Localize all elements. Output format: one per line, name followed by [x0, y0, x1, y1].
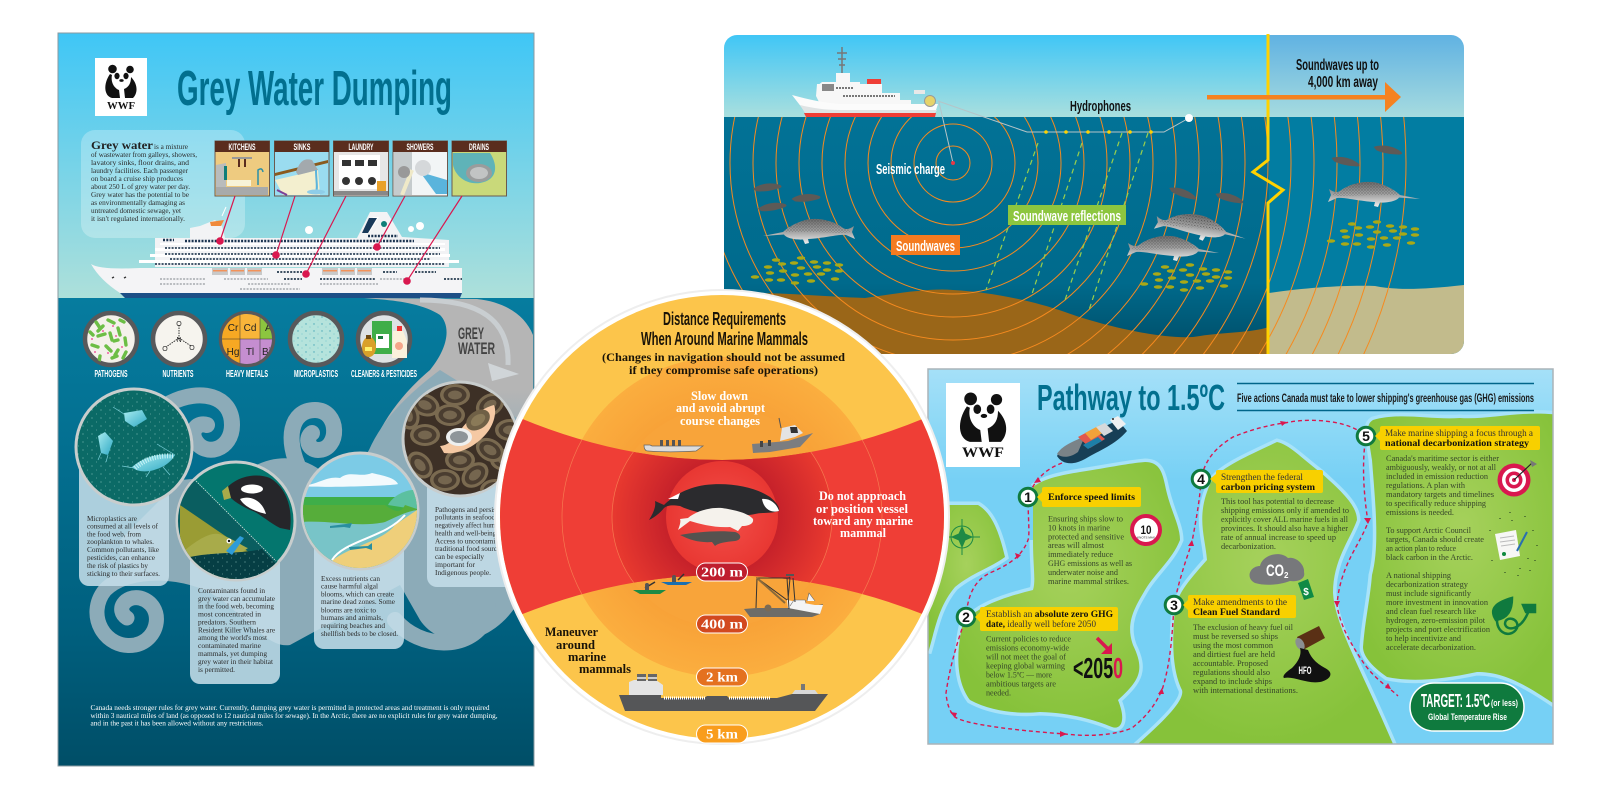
step 5: accelerate decarbonization. [1386, 643, 1476, 652]
step 1: areas will almost [1048, 541, 1105, 550]
callout: food web: Resident Killer Whales are [198, 626, 276, 634]
text block: closing note: within 3 nautical miles of land (as opposed to 12 nautical miles for sewage). In the Arctic, there are no explicit rules for grey water dumping, [90, 711, 498, 720]
icon: nutrients: O [162, 346, 168, 353]
step 2: ambitious targets are [986, 680, 1056, 688]
text: maneuver around: Maneuver [545, 625, 598, 639]
icon row: contaminants [85, 313, 410, 365]
text block: closing note: Canada needs stronger rules for grey water. Currently, dumping grey water is permitted in protected areas and treatment is only required [90, 703, 490, 712]
step 3: expand to include ships [1193, 677, 1272, 686]
distance label: 2 km: 2 km [706, 670, 738, 686]
text block: closing note: and in the past it has been allowed without any restrictions. [90, 718, 264, 728]
cruise ship [91, 207, 462, 298]
icon: kitchens [215, 141, 270, 196]
illustration: plankton circle [76, 389, 192, 505]
callout: algal blooms: cause harmful algal [321, 582, 378, 590]
icon labels: MICROPLASTICS [294, 369, 338, 380]
intro text block: laundry facilities. Each passenger [91, 166, 189, 175]
step 2: needed. [986, 688, 1011, 698]
icon: below 2050 [1073, 638, 1123, 685]
step 4: Strengthen the federal [1221, 472, 1303, 483]
intro text block: Grey water [91, 138, 154, 152]
step 2: 2 [962, 609, 970, 625]
callout: algal blooms: blooms are toxic to [321, 606, 376, 614]
step 1: marine mammal strikes. [1048, 577, 1129, 586]
step 5 [1357, 426, 1540, 652]
step 4: shipping emissions only if amended to [1221, 506, 1349, 515]
heading: grey water: WATER [458, 339, 495, 358]
step 4: carbon pricing system [1221, 483, 1315, 493]
step 2: will not meet the goal of [986, 652, 1066, 662]
icon: HFO barrel: HFO [1298, 665, 1312, 677]
icon: nutrients: O [189, 345, 195, 352]
callout: food web: among the world's most [198, 633, 268, 642]
icon: container ship [1057, 416, 1127, 463]
target badge: TARGET: 1.5ºC [1421, 691, 1490, 711]
distance label: 2 km [696, 668, 748, 686]
icon: showers [393, 141, 448, 196]
step 3: must be reversed so ships [1193, 632, 1278, 641]
step 3 [1165, 595, 1298, 695]
distance label: 400 m: 400 m [701, 618, 743, 632]
icon: heavy metals: Hg [227, 347, 239, 358]
distance label: 5 km: 5 km [706, 728, 738, 742]
step 1: protected and sensitive [1048, 532, 1124, 542]
step 2: keeping global warming [986, 662, 1066, 670]
intro text block: about 250 L of grey water per day. [91, 182, 190, 191]
step 1: GHG emissions as well as [1048, 559, 1132, 568]
callout: food web: is permitted. [198, 665, 235, 674]
callout: food web: most concentrated in [198, 610, 261, 618]
step 5: black carbon in the Arctic. [1386, 553, 1473, 562]
step 5: more investment in innovation [1386, 598, 1489, 607]
callout: food web: grey water can accumulate [198, 594, 276, 603]
step 3: Make amendments to the [1193, 598, 1287, 608]
step 5: national decarbonization strategy [1385, 439, 1529, 449]
text: maneuver around [545, 625, 631, 676]
target badge: Global Temperature Rise [1428, 712, 1507, 723]
step 4: 4 [1197, 471, 1205, 487]
step 2: Current policies to reduce [986, 634, 1071, 644]
callout: microplastics: consumed at all levels of [87, 522, 159, 530]
heading: grey water: GREY [458, 324, 484, 343]
callout: food web: mammals, yet dumping [198, 649, 267, 658]
callout: food web: Contaminants found in [198, 586, 265, 595]
label: soundwave reflections [1008, 205, 1126, 225]
callout: seafood: pollutants in seafood can [435, 512, 507, 522]
icon labels: HEAVY METALS [226, 369, 268, 380]
text block: closing note [90, 703, 498, 728]
label: soundwaves up to 4000 km: Soundwaves up to [1296, 57, 1379, 74]
callout: microplastics: zooplankton to whales. [87, 537, 154, 546]
intro text block: it isn't regulated internationally. [91, 214, 185, 223]
hydrophones array [938, 101, 1193, 165]
target badge [1410, 683, 1524, 731]
heading: distance requirements [602, 309, 845, 377]
step 5: must include significantly [1386, 589, 1472, 598]
distance label: 5 km [696, 725, 748, 743]
step 3: The exclusion of heavy fuel oil [1193, 623, 1294, 632]
bowhead whale [649, 484, 779, 520]
icon: heavy metals: Bi [262, 347, 271, 358]
label: soundwave reflections: Soundwave reflections [1013, 208, 1121, 225]
target badge: (or less) [1491, 698, 1518, 708]
subtitle [1237, 384, 1534, 410]
step 5: To support Arctic Council [1386, 526, 1472, 535]
callout: food web [190, 530, 280, 684]
callout: seafood: traditional food sources [435, 544, 503, 553]
label: soundwaves: Soundwaves [896, 238, 955, 255]
title: Pathway to 1.5C: Pathway to 1.5ºC [1037, 377, 1225, 418]
step 3: accountable. Proposed [1193, 659, 1269, 668]
step 5: hydrogen, zero-emission pilot [1386, 616, 1486, 625]
distance label: 200 m [696, 563, 748, 581]
icon: nutrients: N [176, 337, 182, 344]
step 2: date, ideally well before 2050 [986, 619, 1096, 630]
callout: algal blooms: requiring beaches and [321, 621, 385, 630]
intro text block: is a mixture [154, 142, 189, 151]
illustration: beach circle [300, 453, 420, 570]
marine life: fish schools [751, 220, 1419, 292]
intro text block: untreated domestic sewage, yet [91, 206, 182, 215]
marine life: narwhals [763, 182, 1420, 261]
icon labels [94, 369, 417, 380]
step 5: to specifically reduce shipping [1386, 499, 1487, 508]
seabed [724, 290, 1269, 354]
step 1: Enforce speed limits [1048, 493, 1135, 503]
logo: WWF panda [95, 58, 147, 116]
icon: microplastics [290, 313, 342, 365]
step 3: and dirtiest fuel are held [1193, 650, 1276, 659]
callout: algal blooms: blooms, which can create [321, 590, 395, 598]
icon: 10 knots sign: KNOTS MAX [1137, 536, 1155, 540]
icon: compass [944, 519, 980, 555]
callout: microplastics: Common pollutants, like [87, 545, 160, 554]
text: do not approach: mammal [840, 526, 887, 540]
text: slow down: course changes [680, 414, 760, 428]
step 3: with international destinations. [1193, 686, 1298, 695]
beluga [678, 508, 753, 531]
route arrowheads [950, 421, 1391, 737]
callout: algal blooms: Excess nutrients can [321, 574, 380, 583]
intro text block: Grey water has the potential to be [91, 190, 190, 199]
step 1: Ensuring ships slow to [1048, 514, 1123, 524]
icon: signed document [1490, 512, 1537, 576]
step 4: explicitly cover ALL marine fuels in all [1221, 515, 1349, 524]
logo: WWF panda: WWF [107, 100, 135, 112]
panel: Grey Water Dumping [58, 33, 534, 766]
icon: target [1498, 460, 1537, 496]
icon: 10 knots sign: 10 [1140, 523, 1152, 537]
divider: break in scale [1253, 34, 1283, 354]
illustration: food web circle [175, 462, 300, 590]
panel: distance requirements circle [490, 289, 950, 750]
panel: Pathway to 1.5C [928, 369, 1560, 744]
distance label: 200 m: 200 m [701, 566, 743, 580]
callout: microplastics: sticking to their surfaces. [87, 569, 160, 578]
survey ship [792, 47, 938, 117]
text: maneuver around: marine [568, 650, 606, 664]
text: maneuver around: mammals [579, 662, 631, 676]
soundwave rings [724, 117, 1406, 354]
icon: heavy metals [221, 313, 274, 365]
callout: algal blooms: shellfish beds to be closed. [321, 629, 398, 638]
distance label: 400 m [696, 615, 748, 633]
callout: algal blooms: humans and animals, [321, 613, 383, 622]
icon: pathogens [85, 313, 137, 365]
step 5: Canada's maritime sector is either [1386, 454, 1499, 463]
icon: 10 knots sign [1132, 516, 1160, 544]
intro text block: as environmentally damaging as [91, 198, 185, 207]
heading: distance requirements: (Changes in navigation should not be assumed [602, 350, 845, 364]
step 3: Clean Fuel Standard [1193, 608, 1281, 618]
arrow: soundwave reach [1207, 82, 1401, 112]
icon: nutrients [153, 313, 205, 365]
callout: seafood: health and well-being. [435, 528, 498, 538]
route: dashed pink path [946, 420, 1398, 735]
callout: microplastics: the risk of plastics by [87, 561, 148, 570]
step 5: 5 [1362, 428, 1370, 444]
step 5: an action plan to reduce [1386, 544, 1456, 553]
vessel: fishing trawler [744, 574, 823, 617]
icon: drains: DRAINS [469, 142, 489, 152]
step 3: using the most common [1193, 641, 1274, 650]
step 5: projects and port electrification [1386, 625, 1491, 634]
callout: food web: grey water in their habitat [198, 657, 274, 666]
intro text block: lavatory sinks, floor drains, and [91, 158, 189, 167]
label: soundwaves up to 4000 km [1296, 57, 1379, 91]
illustration: oyster circle [402, 380, 516, 498]
intro text block: of wastewater from galleys, showers, [91, 150, 197, 159]
step 5: to help incentivize and [1386, 634, 1462, 643]
text: slow down: and avoid abrupt [676, 401, 766, 415]
text: do not approach [813, 489, 913, 540]
icon: sinks: SINKS [294, 142, 310, 152]
step 4 [1192, 470, 1349, 551]
callout: microplastics: pesticides, can enhance [87, 553, 156, 562]
text: do not approach: or position vessel [816, 502, 909, 516]
step 5: ambiguously, weakly, or not at all [1386, 463, 1497, 472]
callout: algal blooms [314, 520, 404, 649]
icon: laundry: LAUNDRY [348, 142, 374, 152]
step 4: rate of annual increase to speed up [1221, 533, 1336, 542]
far seabed [1269, 285, 1464, 354]
text: do not approach: toward any marine [813, 514, 913, 528]
callout: seafood: Pathogens and persistent [435, 505, 508, 514]
callout: microplastics: Microplastics are [87, 514, 138, 523]
icon: CO2 cloud with tag: $ [1303, 587, 1309, 598]
soundwave reflections [986, 133, 1148, 310]
logo: WWF panda [946, 383, 1020, 467]
callout: food web: in the food web, becoming [198, 602, 274, 610]
arrow: grey water flow [420, 300, 519, 381]
heading: grey water [458, 324, 495, 358]
callout: food web: predators. Southern [198, 618, 256, 626]
icon: HFO barrel [1283, 626, 1330, 682]
step 4: decarbonization. [1221, 542, 1276, 551]
icon: below 2050: <2050 [1073, 653, 1123, 685]
step 5: regulations. A plan with [1386, 481, 1466, 490]
step 5: A national shipping [1386, 571, 1452, 580]
heading: distance requirements: if they compromise safe operations) [629, 363, 818, 377]
step 4: provinces. It should also have a higher [1221, 524, 1348, 533]
step 5: emissions is needed. [1386, 508, 1454, 517]
callout: seafood: negatively affect human [435, 520, 502, 530]
icon labels: NUTRIENTS [162, 369, 194, 380]
step 2: below 1.5ºC — more [986, 670, 1052, 680]
callout: food web: contaminated marine [198, 641, 262, 650]
callout: microplastics [79, 450, 169, 586]
icon: sinks [274, 141, 329, 196]
step 5: targets, Canada should create [1386, 535, 1484, 544]
step 2 [957, 607, 1118, 698]
land masses [928, 414, 1560, 744]
text: do not approach: Do not approach [819, 489, 906, 503]
intro text block: on board a cruise ship produces [91, 174, 183, 183]
title: Grey Water Dumping: Grey Water Dumping [177, 62, 452, 116]
step 5: mandatory targets and timelines [1386, 490, 1494, 499]
logo: WWF panda: WWF [962, 445, 1004, 461]
step 1: 10 knots in marine [1048, 524, 1110, 532]
marine life: seals [752, 145, 1403, 214]
heading: distance requirements: Distance Requirements [663, 309, 786, 329]
callout: seafood: can be especially [435, 552, 484, 561]
icon: CO2 cloud with tag: CO [1266, 561, 1284, 580]
marine mammals [649, 484, 779, 546]
step 1 [1019, 487, 1141, 586]
icon: heavy metals: Al [265, 323, 274, 334]
leader lines with dots [216, 196, 462, 285]
step 5: decarbonization strategy [1386, 580, 1469, 589]
icon: green plug leaf [1493, 598, 1535, 634]
icon: kitchens: KITCHENS [228, 142, 256, 152]
step 5: and clean fuel research like [1386, 607, 1476, 616]
text: maneuver around: around [556, 638, 595, 652]
icon: laundry [334, 141, 388, 196]
icon: showers: SHOWERS [406, 142, 434, 152]
icon labels: PATHOGENS [94, 369, 128, 380]
vessel: patrol boat [752, 418, 813, 453]
label: soundwaves [891, 235, 960, 255]
step 1: immediately reduce [1048, 550, 1113, 559]
text: slow down [676, 389, 766, 428]
grey water river [364, 298, 533, 520]
icon: drains [452, 141, 506, 196]
label: seismic charge: Seismic charge [876, 161, 945, 178]
callout: seafood: important for [435, 560, 476, 569]
icon: CO2 cloud with tag: 2 [1284, 571, 1289, 580]
step 2: Establish an absolute zero GHG [986, 610, 1114, 620]
seal [680, 531, 740, 546]
step 3: 3 [1170, 597, 1178, 613]
label: soundwaves up to 4000 km: 4,000 km away [1308, 74, 1378, 91]
vessel: kayaks [633, 574, 692, 594]
icon: heavy metals: Cd [244, 323, 256, 334]
icon: cleaners and pesticides [358, 313, 410, 365]
vessel: tanker [619, 674, 828, 711]
icon: heavy metals: Cr [228, 323, 239, 334]
contaminant tentacles [97, 370, 520, 645]
panel: seismic survey [724, 34, 1464, 354]
step 5: Make marine shipping a focus through a [1385, 428, 1534, 439]
step 1: 1 [1024, 489, 1032, 505]
callout: microplastics: the food web, from [87, 530, 141, 538]
step 1: underwater noise and [1048, 568, 1119, 577]
callout: seafood: Indigenous people. [435, 568, 491, 577]
step 2: emissions economy-wide [986, 644, 1069, 652]
step 4: This tool has potential to decrease [1221, 497, 1334, 506]
vessel: inflatable [644, 440, 703, 452]
label: hydrophones: Hydrophones [1070, 98, 1131, 115]
callout: algal blooms: marine dead zones. Some [321, 597, 396, 606]
icon labels: CLEANERS & PESTICIDES [351, 369, 417, 380]
step 5: included in emission reduction [1386, 472, 1489, 481]
step 3: regulations should also [1193, 668, 1270, 677]
icon: heavy metals: Tl [246, 347, 254, 358]
icon: nutrients: O [176, 321, 182, 328]
callout: seafood [427, 450, 527, 587]
callout: seafood: Access to uncontaminated [435, 536, 511, 546]
text: slow down: Slow down [691, 389, 748, 403]
icon: CO2 cloud with tag [1250, 554, 1314, 600]
intro text block [81, 130, 245, 238]
heading: distance requirements: When Around Marine Mammals [641, 329, 808, 349]
